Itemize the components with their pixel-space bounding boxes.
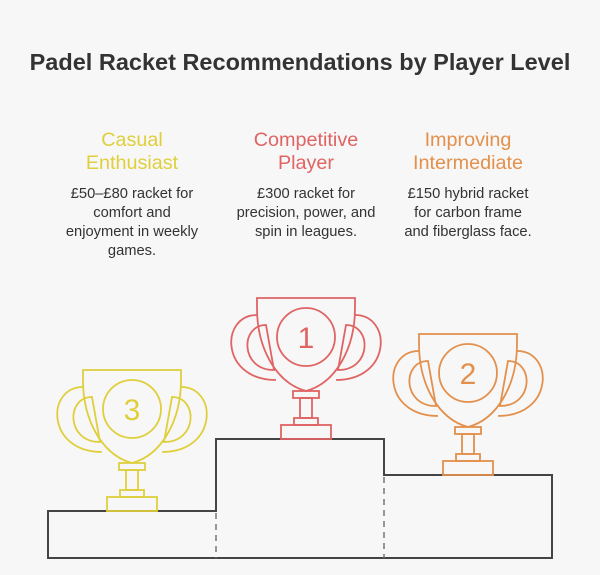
column: casual enthusiast	[66, 129, 198, 259]
column: improving intermediate: Improving	[425, 129, 511, 151]
trophy 2: 2	[460, 358, 476, 391]
column: casual enthusiast: £50–£80 racket for	[71, 186, 193, 202]
column: competitive player: spin in leagues.	[255, 224, 357, 240]
column: competitive player: £300 racket for	[257, 186, 355, 202]
column: competitive player	[237, 129, 375, 240]
trophy 3	[57, 370, 207, 511]
column: competitive player: precision, power, and	[237, 205, 375, 221]
column: casual enthusiast: Enthusiast	[86, 152, 178, 174]
column: casual enthusiast: Casual	[101, 129, 163, 151]
column: improving intermediate: for carbon frame	[414, 205, 522, 221]
trophy 3: 3	[124, 394, 140, 427]
column: improving intermediate: Intermediate	[413, 152, 523, 174]
column: casual enthusiast: comfort and	[93, 205, 171, 221]
trophy 2	[393, 334, 543, 475]
column: casual enthusiast: games.	[108, 243, 156, 259]
column: improving intermediate	[404, 129, 532, 240]
podium	[48, 439, 552, 558]
column: improving intermediate: £150 hybrid racket	[408, 186, 528, 202]
column: competitive player: Player	[278, 152, 334, 174]
column: improving intermediate: and fiberglass face.	[404, 224, 532, 240]
title: Padel Racket Recommendations by Player Level	[30, 49, 570, 75]
trophy 1: 1	[298, 322, 314, 355]
column: competitive player: Competitive	[254, 129, 358, 151]
trophy 1	[231, 298, 381, 439]
column: casual enthusiast: enjoyment in weekly	[66, 224, 198, 240]
